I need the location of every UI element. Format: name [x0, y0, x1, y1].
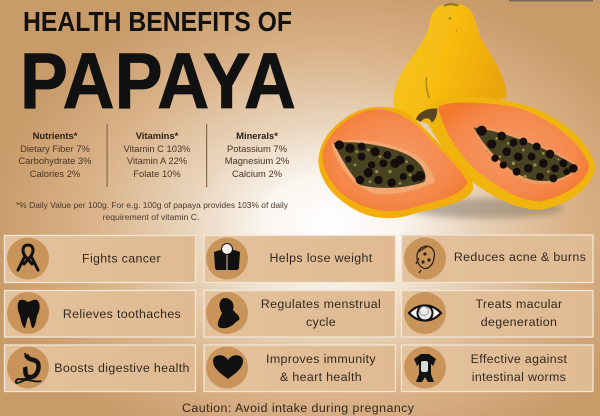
card: helps lose weight: [204, 236, 396, 282]
divider: vitamins and minerals: [206, 124, 207, 187]
card: relieves toothaches: [4, 290, 196, 337]
left papaya seeds: [333, 140, 426, 188]
column: vitamins: Vitamin C 103%: [123, 143, 191, 154]
whole papaya: [393, 4, 507, 121]
icon: ribbon: [18, 245, 38, 270]
column: minerals: Potassium 7%: [227, 143, 287, 154]
column: vitamins: Vitamins*: [136, 130, 179, 141]
column: vitamins: Vitamin A 22%: [127, 155, 187, 166]
column: vitamins: Folate 10%: [133, 168, 181, 179]
right papaya half: [416, 97, 595, 210]
icon: weighing scale: [214, 244, 240, 270]
card: effective against intestinal worms: intestinal worms: [472, 370, 566, 384]
footnote: requirement of vitamin C.: [102, 212, 200, 222]
column: minerals: Calcium 2%: [232, 168, 282, 179]
right papaya seeds: [473, 126, 578, 182]
fruit shadow: [410, 198, 563, 218]
icon: face with acne: [416, 246, 434, 273]
card: effective against intestinal worms: Effective against: [471, 352, 568, 366]
column: minerals: [225, 130, 289, 179]
nutrition table: [19, 124, 289, 187]
card: fights cancer: [4, 236, 196, 282]
column: nutrients: [19, 130, 91, 179]
column: nutrients: Calories 2%: [30, 168, 80, 179]
card: reduces acne and burns: Reduces acne & burns: [454, 250, 586, 264]
column: nutrients: Carbohydrate 3%: [19, 155, 91, 166]
column: vitamins: [123, 130, 191, 179]
footnote: [16, 200, 289, 222]
icon: stomach: [16, 353, 41, 383]
card: reduces acne and burns: [402, 235, 593, 282]
card: regulates menstrual cycle: [204, 290, 396, 337]
card: relieves toothaches: Relieves toothaches: [63, 307, 181, 321]
card: regulates menstrual cycle: cycle: [306, 315, 336, 329]
card: treats macular degeneration: [402, 290, 593, 337]
title line: health benefits of: HEALTH BENEFITS OF: [23, 6, 292, 37]
column: minerals: Minerals*: [236, 130, 278, 141]
title: [20, 6, 296, 125]
card: fights cancer: Fights cancer: [82, 252, 161, 266]
icon: eye: [409, 306, 441, 320]
column: minerals: Magnesium 2%: [225, 155, 289, 166]
footnote: *% Daily Value per 100g. For e.g. 100g of papaya provides 103% of daily: [16, 200, 289, 210]
card: boosts digestive health: [4, 345, 196, 392]
card: treats macular degeneration: Treats macular: [475, 297, 563, 311]
card: regulates menstrual cycle: Regulates menstrual: [261, 297, 381, 311]
card: boosts digestive health: Boosts digestive health: [54, 361, 190, 375]
benefit grid: [4, 235, 593, 392]
card: improves immunity and heart health: Improves immunity: [266, 352, 376, 366]
icon: woman silhouette: [218, 298, 239, 328]
icon: torso with intestines: [414, 354, 436, 382]
column: nutrients: Nutrients*: [33, 130, 78, 141]
card: helps lose weight: Helps lose weight: [269, 251, 373, 265]
caution note: Caution: Avoid intake during pregnancy: [182, 401, 415, 415]
card: improves immunity and heart health: & heart health: [280, 370, 362, 384]
divider: nutrients and vitamins: [106, 124, 108, 187]
card: treats macular degeneration: degeneration: [481, 315, 557, 329]
title line: papaya: PAPAYA: [20, 36, 296, 125]
left papaya half: [318, 107, 473, 218]
card: effective against intestinal worms: [402, 345, 593, 392]
top edge tab: [509, 0, 593, 2]
right papaya stem: [416, 108, 437, 123]
icon: heart: [213, 355, 243, 379]
column: nutrients: Dietary Fiber 7%: [20, 143, 90, 154]
illustration: papayas: [318, 4, 595, 218]
icon: tooth: [18, 300, 40, 328]
card: improves immunity and heart health: [204, 345, 396, 392]
